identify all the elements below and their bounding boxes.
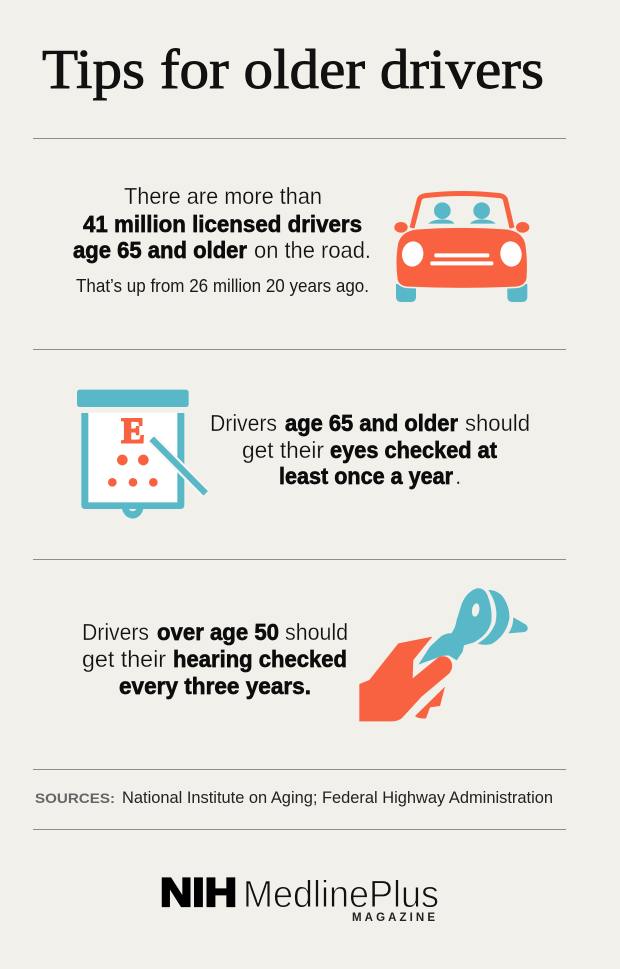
- text block: licensed drivers statistic: 41 million licensed drivers: [83, 211, 362, 237]
- text block: eye check advice: get their: [242, 437, 324, 463]
- text block: hearing check advice: every three years.: [119, 673, 311, 699]
- text block: licensed drivers statistic: on the road.: [254, 237, 371, 263]
- text block: licensed drivers statistic: age 65 and older: [73, 237, 247, 263]
- text block: licensed drivers statistic: [73, 183, 371, 296]
- text block: hearing check advice: hearing checked: [173, 646, 347, 672]
- panel: eye checks: [77, 390, 530, 518]
- sources: SOURCES:: [35, 790, 115, 806]
- text block: licensed drivers statistic: That’s up from 26 million 20 years ago.: [76, 275, 369, 296]
- text block: hearing check advice: should: [285, 619, 348, 645]
- icon: otoscope in hand: [359, 588, 528, 721]
- text block: eye check advice: age 65 and older: [285, 410, 458, 436]
- logo: NIH MedlinePlus Magazine: NIH: [160, 871, 237, 915]
- icon: eye chart: E: [121, 411, 145, 451]
- text block: hearing check advice: over age 50: [157, 619, 279, 645]
- logo: NIH MedlinePlus Magazine: MedlinePlus: [243, 874, 439, 916]
- text block: eye check advice: Drivers: [210, 410, 277, 436]
- icon: eye chart: [77, 390, 206, 518]
- panel: licensed drivers: [73, 183, 529, 302]
- text block: eye check advice: [210, 410, 530, 489]
- text block: eye check advice: should: [465, 410, 530, 436]
- title: Tips for older drivers: [42, 39, 544, 101]
- text block: hearing check advice: get their: [82, 646, 166, 672]
- logo: NIH MedlinePlus Magazine: [160, 871, 439, 924]
- text block: eye check advice: least once a year: [279, 463, 453, 489]
- panel: hearing checks: [82, 588, 528, 721]
- text block: eye check advice: .: [455, 463, 462, 489]
- logo: NIH MedlinePlus Magazine: MAGAZINE: [352, 912, 435, 924]
- sources: National Institute on Aging; Federal Highway Administration: [122, 789, 553, 807]
- text block: eye check advice: eyes checked at: [330, 437, 497, 463]
- text block: hearing check advice: Drivers: [82, 619, 149, 645]
- text block: licensed drivers statistic: There are more than: [124, 183, 322, 209]
- text block: hearing check advice: [82, 619, 348, 699]
- icon: car: [394, 193, 529, 302]
